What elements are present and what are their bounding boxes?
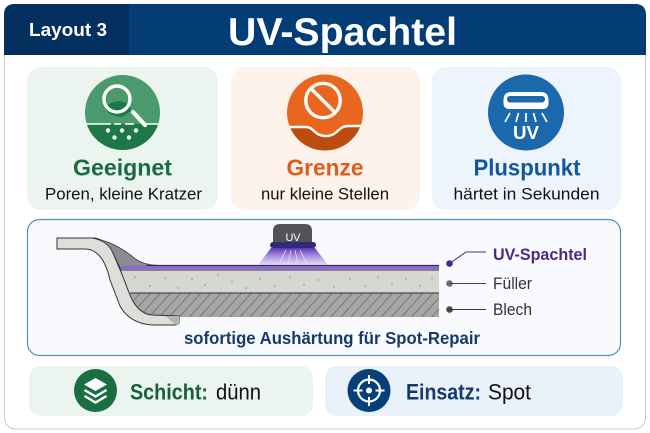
layout tab <box>4 4 129 55</box>
text: nur kleine Stellen <box>261 184 389 204</box>
title: UV-Spachtel <box>228 11 457 54</box>
filler layer <box>120 270 439 293</box>
label: Blech: Blech <box>493 300 532 319</box>
UV lamp <box>258 224 328 265</box>
bent sheet edge <box>57 238 179 325</box>
icon: layers <box>74 369 117 412</box>
label: UV-Spachtel <box>446 245 587 267</box>
text: Einsatz: <box>406 380 481 404</box>
text: härtet in Sekunden <box>454 184 600 204</box>
heading: Geeignet <box>73 154 172 180</box>
layout tab: Layout 3 <box>29 19 107 40</box>
spachtel wedge <box>92 238 160 270</box>
icon: magnifier over surface <box>85 75 161 152</box>
pill: Schicht: dünn <box>216 380 261 404</box>
caption: sofortige Aushärtung für Spot-Repair <box>184 328 480 348</box>
label: Blech <box>446 300 532 319</box>
label: Füller <box>446 274 532 293</box>
icon: UV lamp: UV <box>513 123 539 143</box>
cross-section diagram <box>57 238 439 325</box>
panel: Grenze <box>231 67 420 210</box>
label: Füller: Füller <box>493 274 532 293</box>
icon: prohibition over dent <box>287 74 363 150</box>
UV-Spachtel layer <box>121 266 439 270</box>
label: UV-Spachtel: UV-Spachtel <box>493 245 587 264</box>
text: Schicht: <box>130 380 208 404</box>
UV lamp: UV <box>286 232 301 244</box>
header bar <box>4 4 646 55</box>
icon: UV lamp <box>488 74 564 150</box>
pill: Einsatz <box>325 366 623 416</box>
pill: Schicht <box>29 366 313 416</box>
icon: target <box>348 369 390 412</box>
heading: Pluspunkt <box>474 154 581 180</box>
heading: Grenze <box>286 154 364 180</box>
text: Poren, kleine Kratzer <box>45 184 202 204</box>
sheet metal layer <box>130 293 439 317</box>
panel: Pluspunkt <box>432 67 621 210</box>
panel: layer diagram <box>28 220 620 356</box>
pill: Einsatz: Spot <box>488 380 531 404</box>
panel: Geeignet <box>27 67 218 210</box>
